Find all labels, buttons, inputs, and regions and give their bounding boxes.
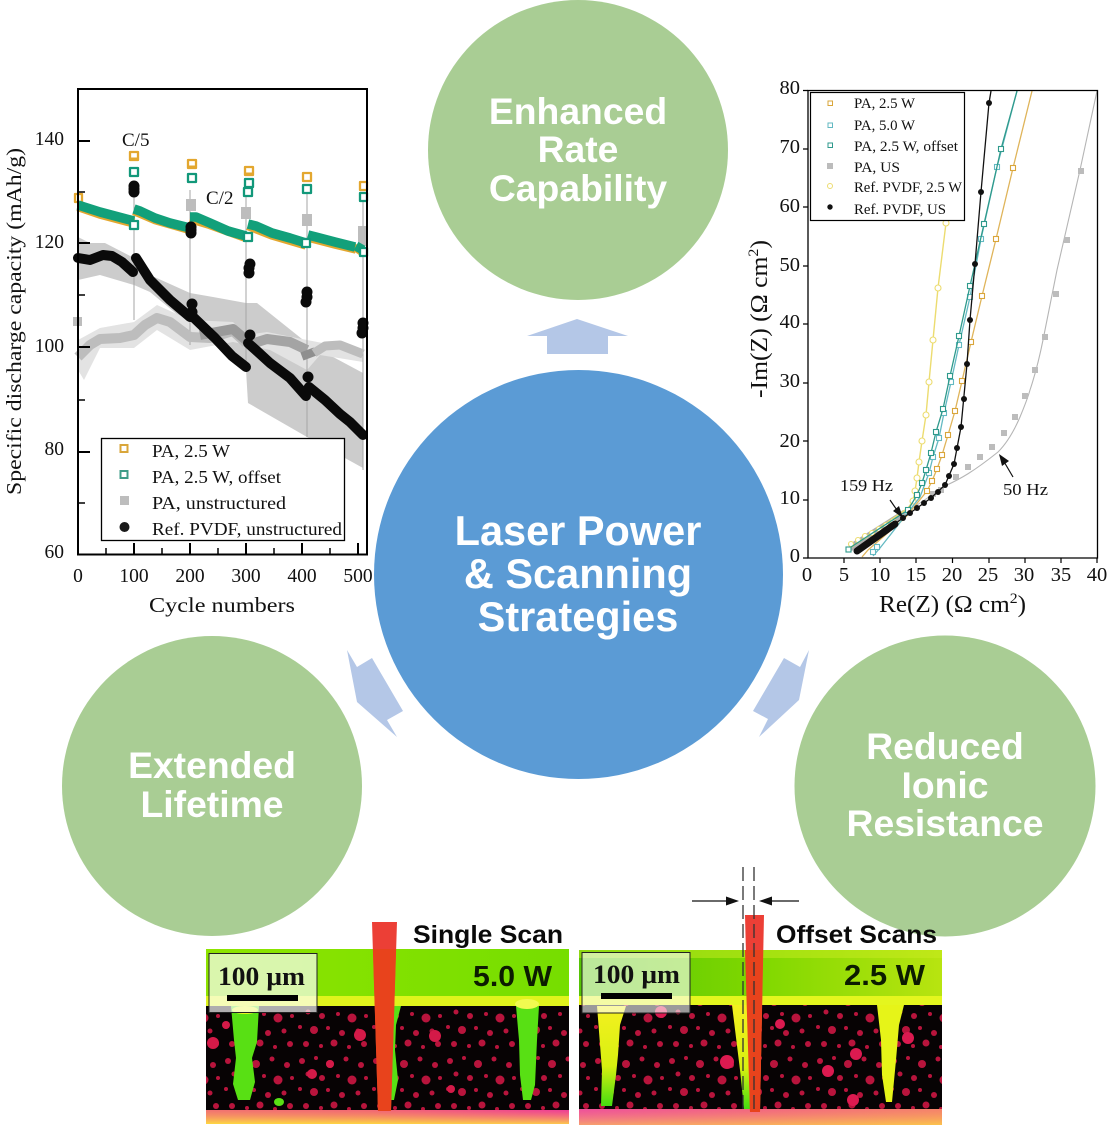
series: PA 2.5 W [862,91,1032,557]
x axis tick labels: 100 [119,566,149,587]
liquid channels [231,1006,539,1106]
heading: single scan: Single Scan [413,921,563,949]
frequency annotation: 50 Hz: 50 Hz [1003,480,1048,499]
chart: discharge capacity vs cycle number [2,89,373,617]
legend: PA, 2.5 W [152,441,231,461]
circle: extended lifetime [62,636,362,936]
circle: enhanced rate capability: Capability [489,167,667,209]
legend: PA, 5.0 W [854,118,915,134]
series: PA 2.5 W offset [846,91,1017,552]
circle: enhanced rate capability: Enhanced [489,90,667,132]
x axis title: Cycle numbers [149,593,295,617]
x axis tick labels: 25 [978,564,998,586]
offset marker: dashed lines [743,867,754,1110]
rate labels: C/5 [122,130,149,151]
x axis title: ) [1018,592,1026,618]
scale box: 100 µm [218,962,305,991]
circle: enhanced rate capability [428,0,728,300]
legend: Ref. PVDF, unstructured [152,519,342,539]
laser beam [745,915,764,1112]
x axis tick labels: 5 [839,564,849,586]
y axis tick labels: 140 [35,129,64,150]
y axis title: Specific discharge capacity (mAh/g) [2,148,26,495]
scale box: 100 µm [593,960,680,989]
series: Ref PVDF 2.5 W [848,190,952,548]
circle: extended lifetime: Lifetime [140,783,284,825]
series: PA US [850,91,1097,551]
axes frame [78,89,367,554]
legend [102,438,344,540]
x axis tick labels: 30 [1014,564,1034,586]
micrograph: single scan 5.0 W [206,921,569,1124]
x axis title: 2 [1010,591,1018,607]
heading: offset scans: Offset Scans [776,921,937,949]
frequency annotation: 50 Hz [999,454,1048,499]
x axis tick labels [73,566,373,587]
y axis tick labels [35,129,64,563]
large particles [655,1006,914,1106]
circle: reduced ionic resistance: Reduced [866,725,1024,767]
x axis tick labels: 20 [942,564,962,586]
x axis tick labels: 200 [175,566,205,587]
y axis title: -Im(Z) (Ω cm [747,266,773,398]
x axis tick labels: 40 [1087,564,1107,586]
series: PA 2.5 W offset [78,168,367,256]
large particles [207,1021,455,1093]
x axis title: Re(Z) (Ω cm [879,592,1003,618]
y axis tick labels: 10 [780,487,800,509]
liquid channels [597,1006,626,1106]
y axis tick labels: 50 [780,254,800,276]
x axis tick labels: 300 [231,566,261,587]
circle: laser power and scanning strategies: Laser Power [455,507,701,554]
arrow: to reduced ionic resistance [753,650,809,737]
y axis tick labels: 120 [35,232,64,253]
legend: PA, 2.5 W, offset [854,139,958,155]
x axis tick labels: 0 [802,564,812,586]
legend: PA, US [854,160,900,176]
y axis tick labels: 80 [44,439,64,460]
series: PA 5.0 W [870,91,1017,556]
arrow: to extended lifetime [347,650,403,737]
x axis tick labels: 10 [870,564,890,586]
y axis tick labels: 70 [780,136,800,158]
y axis tick labels: 100 [35,336,64,357]
legend [810,92,964,220]
scale box [582,952,690,1013]
y axis tick labels: 0 [790,545,800,567]
frequency annotation: 159 Hz: 159 Hz [840,476,893,495]
rate labels [122,130,233,209]
y axis tick labels: 40 [780,311,800,333]
y axis title: ) [747,240,773,249]
legend: Ref. PVDF, 2.5 W [854,180,962,196]
axes frame [803,90,1098,563]
x axis tick labels: 400 [287,566,317,587]
chart: impedance Nyquist plot [746,77,1107,618]
power label: 5.0 W [473,961,553,993]
scale box [209,954,317,1012]
micrograph: offset scans 2.5 W [579,867,942,1125]
x axis tick labels: 35 [1051,564,1071,586]
rate labels: C/2 [206,188,233,209]
laser beam [372,922,397,1111]
error bands [78,190,363,470]
circle: reduced ionic resistance: Ionic [901,764,989,806]
x axis tick labels: 15 [906,564,926,586]
y axis tick labels: 60 [780,195,800,217]
series: Ref PVDF unstructured [78,180,368,435]
arrow: up to rate capability [527,319,628,354]
circle: reduced ionic resistance: Resistance [847,802,1043,844]
x axis tick labels [802,564,1107,586]
y axis tick labels [780,77,800,567]
y axis tick labels: 20 [780,430,800,452]
circle: laser power and scanning strategies: Strategies [478,593,678,640]
y axis tick labels: 60 [44,542,64,563]
legend: PA, 2.5 W, offset [152,467,281,487]
circle: laser power and scanning strategies [374,370,783,779]
series: Ref PVDF US [857,91,992,551]
legend: PA, unstructured [152,493,286,513]
circle: extended lifetime: Extended [128,744,296,786]
x axis tick labels: 500 [343,566,373,587]
series: PA unstructured [73,199,368,358]
x axis tick labels: 0 [73,566,83,587]
frequency annotation: 159 Hz [840,476,903,518]
offset marker: arrows [692,896,799,906]
circle: laser power and scanning strategies: & Scanning [464,550,692,597]
power label: 2.5 W [844,960,926,992]
circle: enhanced rate capability: Rate [538,128,618,170]
y axis tick labels: 80 [780,77,800,99]
y axis tick labels: 30 [780,370,800,392]
y axis title: 2 [746,249,762,257]
legend: Ref. PVDF, US [854,202,946,218]
circle: reduced ionic resistance [794,636,1096,936]
legend: PA, 2.5 W [854,96,915,112]
series: PA 2.5 W [75,152,367,252]
